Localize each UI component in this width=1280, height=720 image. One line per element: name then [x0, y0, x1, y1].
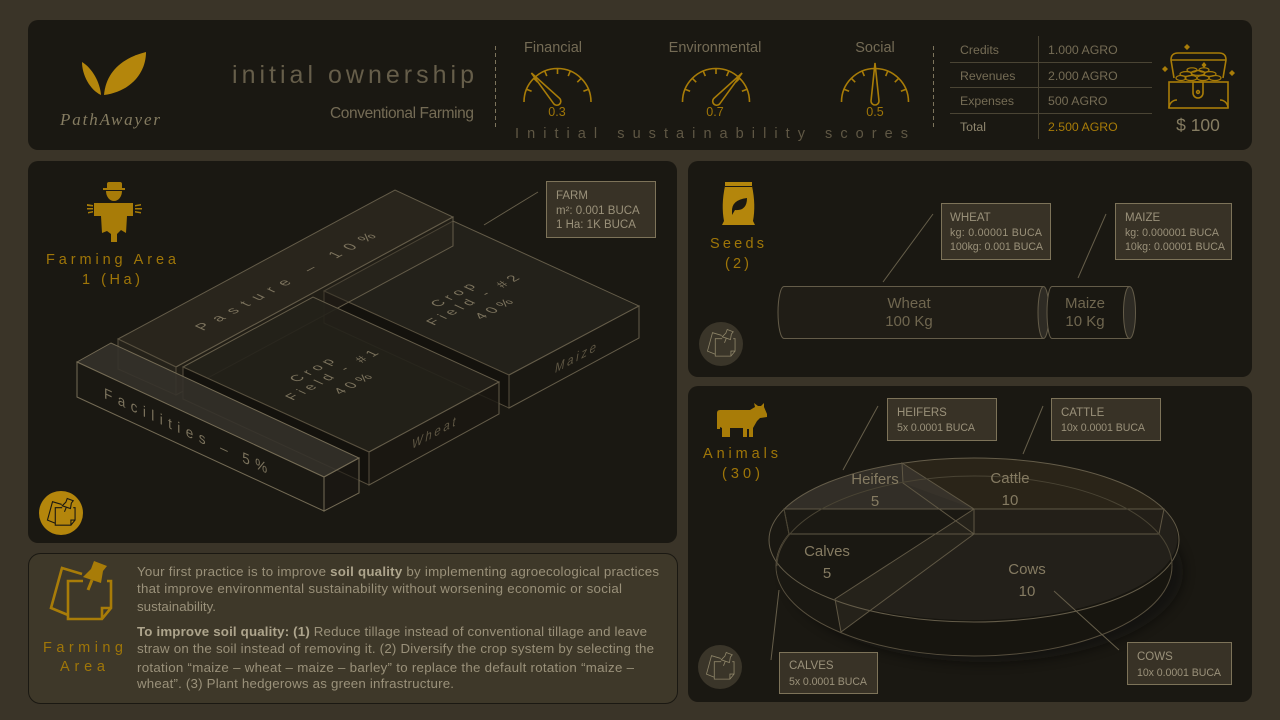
block: crop field 1: 40%: [329, 370, 380, 396]
label: animals: [703, 446, 778, 482]
gauge: social: [842, 40, 908, 119]
block: crop field 1: Wheat: [412, 412, 458, 452]
callout: calves: 5x 0.0001 BUCA: [789, 676, 868, 688]
logo: PathAwayer: PathAwayer: [59, 110, 160, 129]
chart: pie of animals: [769, 458, 1183, 662]
block: crop field 2: [324, 221, 639, 408]
callout: heifers: [843, 398, 996, 470]
label: farming area: 1 (Ha): [82, 272, 140, 288]
label: seeds: (2): [725, 256, 749, 272]
callout: cattle: [1023, 398, 1160, 454]
text: practice instructions: To improve soil quality: (1) Reduce tillage instead of conventional tillage and leave: [137, 624, 647, 639]
cylinder: maize: 10 Kg: [1065, 313, 1105, 330]
text: practice instructions: sustainability.: [137, 599, 216, 614]
callout: maize: 10kg: 0.00001 BUCA: [1125, 241, 1226, 253]
chest value: $ 100: [1176, 115, 1220, 135]
pie label: calves: [804, 543, 850, 582]
block: crop field 1: Field - #1: [281, 346, 386, 402]
logo: PathAwayer: [59, 52, 160, 129]
ledger table: 1.000 AGRO: [1048, 43, 1118, 57]
text: practice instructions: rotation “maize – wheat – maize – barley” to replace the default rotation “maize –: [137, 660, 635, 675]
pie label: cattle: Cattle: [990, 470, 1030, 487]
ledger table: 500 AGRO: [1048, 94, 1107, 108]
cylinder: maize: [1047, 286, 1136, 338]
subtitle: Conventional Farming: [330, 105, 474, 122]
callout: cows: 10x 0.0001 BUCA: [1137, 667, 1222, 679]
cylinder: maize: Maize: [1065, 295, 1105, 312]
cylinder: wheat: [778, 286, 1049, 338]
callout: calves: [771, 590, 878, 694]
icon: seed bag: [722, 182, 755, 225]
ledger table: 2.500 AGRO: [1048, 120, 1118, 134]
text: practice instructions: wheat”. (3) Plant hedgerows as green infrastructure.: [136, 676, 454, 691]
ledger table: 2.000 AGRO: [1048, 69, 1118, 83]
label: farming area: Area: [60, 659, 106, 675]
callout: maize: kg: 0.000001 BUCA: [1125, 227, 1220, 239]
block: crop field 2: Crop: [426, 279, 483, 309]
pie label: calves: 5: [823, 565, 831, 582]
panel: farm: [28, 161, 677, 543]
block: facilities: Facilities – 5%: [104, 385, 267, 478]
gauge: financial: 0.3: [548, 105, 566, 119]
callout: cows: COWS: [1137, 651, 1173, 663]
callout: heifers: 5x 0.0001 BUCA: [897, 422, 976, 434]
callout: calves: CALVES: [789, 660, 834, 672]
label: seeds: [710, 236, 764, 272]
block: crop field 2: Field - #2: [422, 271, 527, 327]
gauge: environmental: 0.7: [706, 105, 724, 119]
callout: maize: [1078, 204, 1232, 278]
button: animals notes: [698, 645, 742, 689]
ledger table: [950, 36, 1152, 139]
pie label: cows: Cows: [1008, 561, 1046, 578]
callout: wheat: WHEAT: [950, 212, 991, 224]
label: farming area: [43, 640, 123, 675]
label: seeds: Seeds: [710, 236, 764, 252]
callout: maize: MAIZE: [1125, 212, 1160, 224]
panel: header: [28, 20, 1252, 150]
pie label: calves: Calves: [804, 543, 850, 560]
block: crop field 1: Crop: [285, 354, 342, 384]
title: initial ownership: [232, 61, 474, 89]
icon: pinned notes: [51, 561, 111, 619]
gauge: financial: Financial: [524, 40, 582, 56]
cylinder: wheat: 100 Kg: [885, 313, 933, 330]
callout: wheat: 100kg: 0.001 BUCA: [950, 241, 1044, 253]
text: practice instructions: that improve environmental sustainability without worsening economic or social: [137, 581, 622, 596]
panel: seeds: [688, 161, 1252, 377]
block: crop field 2: Maize: [555, 337, 599, 376]
label: farming area: Farming: [43, 640, 123, 656]
block: pasture: Pasture – 10%: [191, 231, 381, 333]
ledger table: Total: [960, 120, 986, 134]
pie label: cows: [1008, 561, 1046, 600]
panel: practice description: [28, 554, 678, 704]
block: facilities: [77, 343, 359, 511]
text: practice instructions: Your first practice is to improve soil quality by implementing agroecological practices: [137, 564, 659, 579]
callout: wheat: kg: 0.00001 BUCA: [950, 227, 1043, 239]
label: animals: Animals: [703, 446, 778, 462]
gauge: environmental: [669, 40, 761, 119]
pie label: cattle: [990, 470, 1030, 509]
callout: heifers: HEIFERS: [897, 407, 947, 419]
callout: wheat: [883, 204, 1050, 282]
ledger table: Revenues: [960, 69, 1015, 83]
label: farming area: [46, 252, 177, 288]
label: animals: (30): [722, 466, 760, 482]
gauge: social: 0.5: [866, 105, 884, 119]
button: seeds notes: [699, 322, 743, 366]
callout: farm: FARM: [556, 190, 588, 202]
ledger table: Credits: [960, 43, 999, 57]
panel: animals: [688, 386, 1252, 702]
text: practice instructions: [136, 564, 659, 691]
icon: treasure chest: [1162, 44, 1235, 108]
pie label: cows: 10: [1019, 583, 1035, 600]
ledger table: Expenses: [960, 94, 1014, 108]
pie label: heifers: [851, 471, 899, 510]
callout: cattle: 10x 0.0001 BUCA: [1061, 422, 1146, 434]
pie label: cattle: 10: [1002, 492, 1018, 509]
icon: cow: [717, 403, 767, 437]
callout: cows: [1054, 591, 1232, 684]
pie label: heifers: Heifers: [851, 471, 899, 488]
block: crop field 1: [183, 297, 499, 485]
button: farm notes active: [39, 491, 83, 535]
gauge: social: Social: [855, 40, 895, 56]
callout: farm: m²: 0.001 BUCA: [556, 205, 640, 217]
pie label: heifers: 5: [871, 493, 879, 510]
text: practice instructions: straw on the soil instead of removing it. (2) Diversify the crop system by selecting the: [137, 641, 654, 656]
callout: cattle: CATTLE: [1061, 407, 1105, 419]
block: pasture: [118, 190, 453, 395]
block: crop field 2: 40%: [470, 295, 521, 321]
callout: farm: 1 Ha: 1K BUCA: [556, 219, 636, 231]
callout: farm: [484, 182, 656, 238]
icon: scarecrow: [87, 182, 142, 242]
gauge caption: Initial sustainability scores: [515, 126, 908, 142]
label: farming area: Farming Area: [46, 252, 177, 268]
gauge: environmental: Environmental: [669, 40, 761, 56]
cylinder: wheat: Wheat: [887, 295, 932, 312]
gauge: financial: [524, 40, 591, 119]
